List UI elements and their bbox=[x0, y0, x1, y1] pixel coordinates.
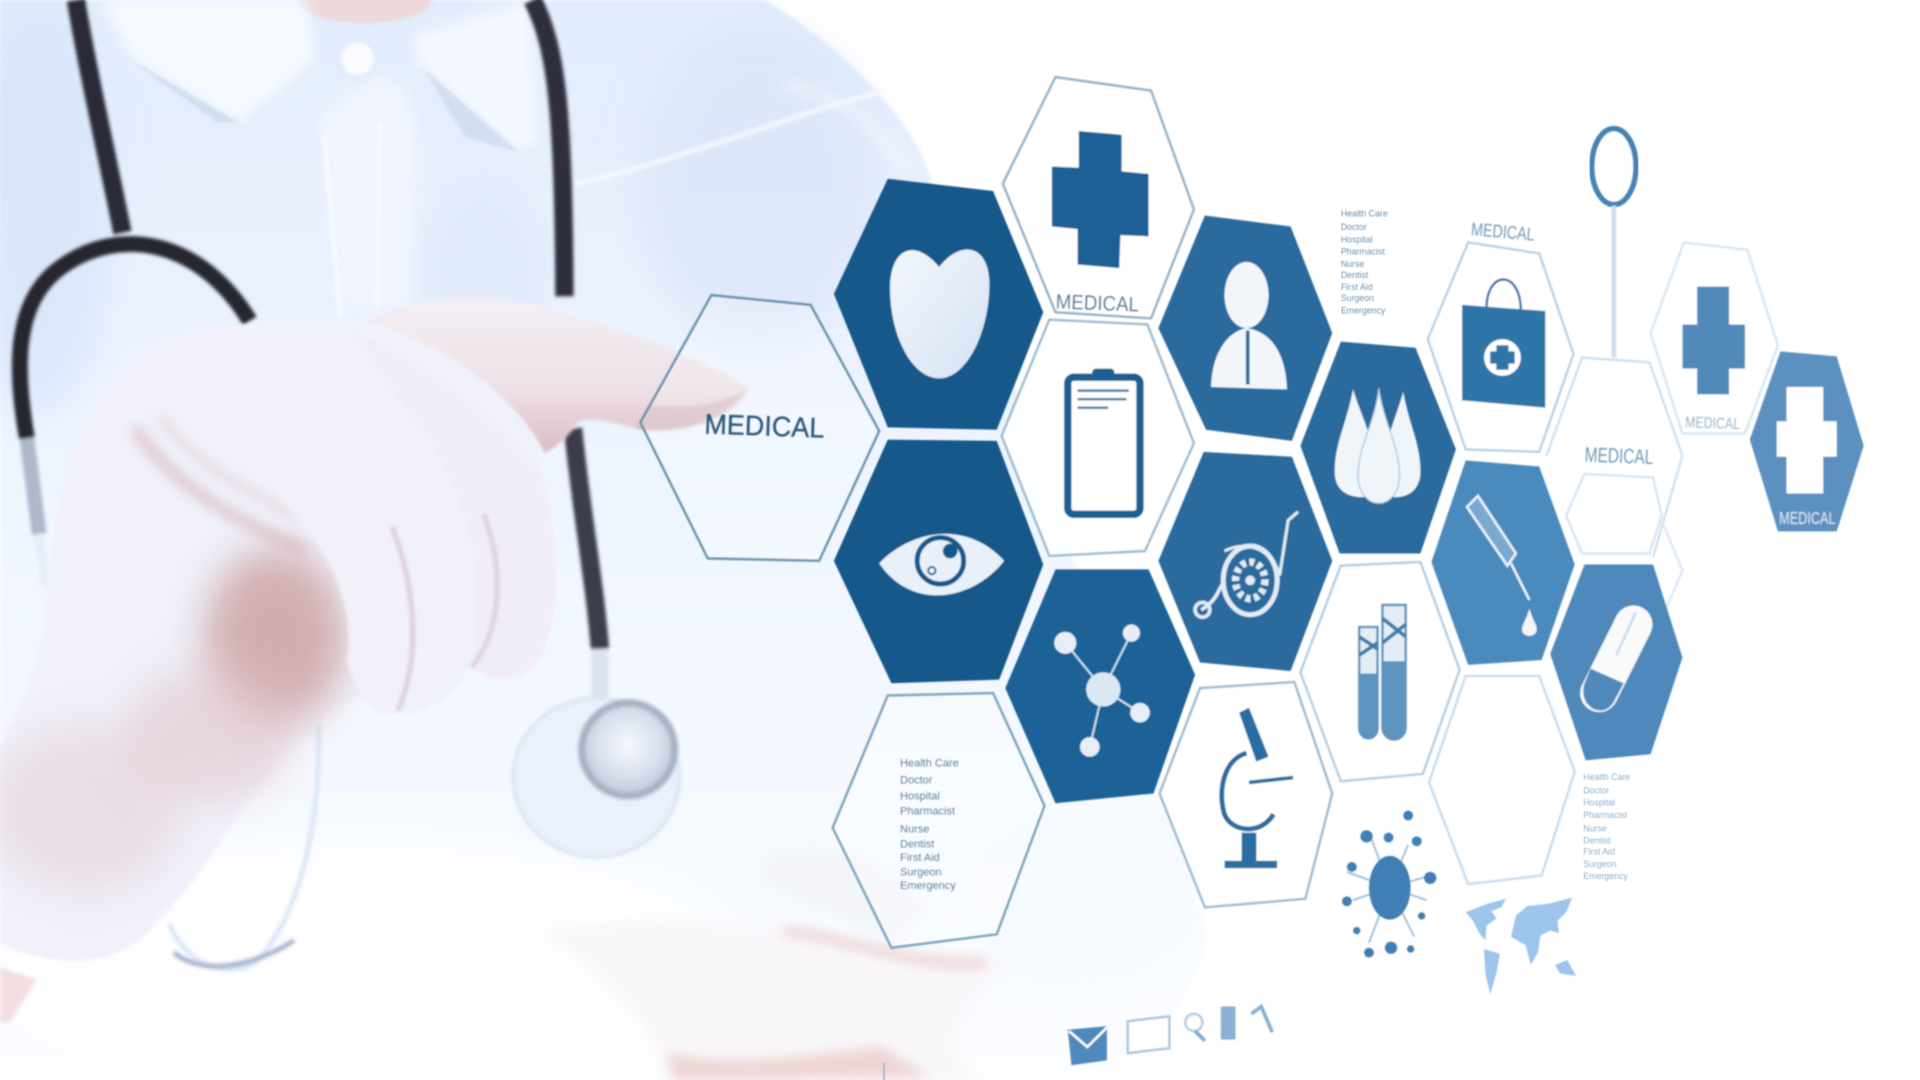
hexagon: clipboard outline bbox=[1002, 320, 1194, 556]
hexagon: MEDICAL label outline bbox=[640, 295, 879, 561]
icon: world map bbox=[1466, 898, 1576, 994]
hexagon: molecule bbox=[1005, 569, 1195, 803]
hexagon: capsule bbox=[1550, 564, 1682, 760]
list text beside bag hexagon: First Aid bbox=[1341, 282, 1373, 292]
finger one bbox=[349, 331, 556, 679]
list text under capsule: Surgeon bbox=[1583, 859, 1617, 869]
stethoscope bbox=[20, 0, 680, 969]
collar bbox=[100, 0, 539, 306]
list text under capsule: Doctor bbox=[1583, 785, 1609, 795]
neck skin bbox=[298, 0, 432, 23]
palm shading bbox=[204, 549, 347, 725]
icon: arrow bbox=[1251, 1007, 1272, 1032]
hexagon: medical cross outline bbox=[1003, 77, 1194, 318]
icon: bars bbox=[1221, 1007, 1236, 1040]
icon: virus bbox=[1342, 811, 1436, 958]
hexagon: water drops bbox=[1300, 342, 1456, 553]
list text under capsule: First Aid bbox=[1583, 847, 1615, 857]
gloved hand pointing bbox=[0, 298, 749, 1022]
icon: monitor bbox=[1128, 1016, 1169, 1053]
finger two bbox=[178, 336, 418, 714]
list text beside bag hexagon: Surgeon bbox=[1341, 293, 1374, 303]
list text beside bag hexagon: Emergency bbox=[1341, 305, 1386, 315]
hexagon: staff list outline: Nurse bbox=[900, 824, 929, 836]
list text beside bag hexagon: Nurse bbox=[1341, 259, 1364, 269]
hexagon: staff list outline: Health Care bbox=[900, 758, 959, 770]
hexagon: MEDICAL pale outline with inner hexagon: MEDICAL bbox=[1584, 444, 1654, 469]
hexagon: microscope outline bbox=[1160, 682, 1332, 907]
list text under capsule: Pharmacist bbox=[1583, 810, 1628, 820]
hexagon: blank outline bbox=[1429, 676, 1575, 884]
list text under capsule: Health Care bbox=[1583, 772, 1630, 782]
connector ring and line bbox=[1592, 129, 1636, 358]
hexagon: medical cross outline: MEDICAL bbox=[1055, 291, 1139, 316]
list text beside bag hexagon: Doctor bbox=[1341, 222, 1367, 232]
hexagon: staff list outline bbox=[833, 693, 1044, 948]
list text beside bag hexagon: Pharmacist bbox=[1341, 247, 1385, 257]
hexagon: eye bbox=[834, 440, 1043, 683]
photo: doctor in white coat bbox=[0, 0, 1206, 1080]
hexagon: MEDICAL pale outline with inner hexagon bbox=[1547, 358, 1682, 624]
list text under capsule: Hospital bbox=[1583, 798, 1615, 808]
list text beside bag hexagon: Dentist bbox=[1341, 270, 1369, 280]
hexagon: staff list outline: Surgeon bbox=[900, 867, 942, 879]
lower hand under the interface bbox=[539, 848, 1004, 1080]
list text beside bag hexagon: Hospital bbox=[1341, 234, 1373, 244]
list text under capsule bbox=[1583, 772, 1630, 881]
bottom edge tick bbox=[883, 1063, 885, 1080]
list text under capsule: Nurse bbox=[1583, 823, 1607, 833]
hexagon: white cross bbox=[1750, 351, 1864, 531]
icon: magnifier bbox=[1185, 1014, 1202, 1031]
hexagon: first aid bag outline bbox=[1428, 218, 1573, 452]
hexagon: small cross outline: MEDICAL bbox=[1685, 414, 1741, 433]
hexagon: staff list outline: Pharmacist bbox=[900, 805, 955, 817]
hexagon: small cross outline bbox=[1651, 242, 1778, 433]
hexagon: person bbox=[1158, 216, 1332, 441]
list text under capsule: Dentist bbox=[1583, 836, 1611, 846]
list text under capsule: Emergency bbox=[1583, 871, 1628, 881]
hexagon: staff list outline: First Aid bbox=[900, 852, 940, 864]
hexagon: first aid bag outline: MEDICAL bbox=[1470, 218, 1536, 245]
hexagon: test tubes outline bbox=[1300, 562, 1460, 781]
hexagon: staff list outline: Hospital bbox=[900, 791, 940, 803]
hexagon: staff list outline: Emergency bbox=[900, 880, 956, 892]
hexagon: MEDICAL label outline: MEDICAL bbox=[704, 408, 825, 444]
bottom toolbar icons bbox=[1068, 1007, 1272, 1065]
hexagon: staff list outline: Doctor bbox=[900, 775, 933, 787]
list text beside bag hexagon: Health Care bbox=[1341, 209, 1388, 219]
icon: envelope bbox=[1068, 1026, 1107, 1065]
hexagon: staff list outline: Dentist bbox=[900, 838, 934, 850]
hexagon: syringe bbox=[1431, 460, 1575, 665]
hexagon: white cross: MEDICAL bbox=[1779, 508, 1836, 528]
hexagon: heart bbox=[834, 179, 1043, 430]
list text beside bag hexagon bbox=[1341, 209, 1388, 315]
hexagon: wheelchair bbox=[1158, 452, 1332, 671]
